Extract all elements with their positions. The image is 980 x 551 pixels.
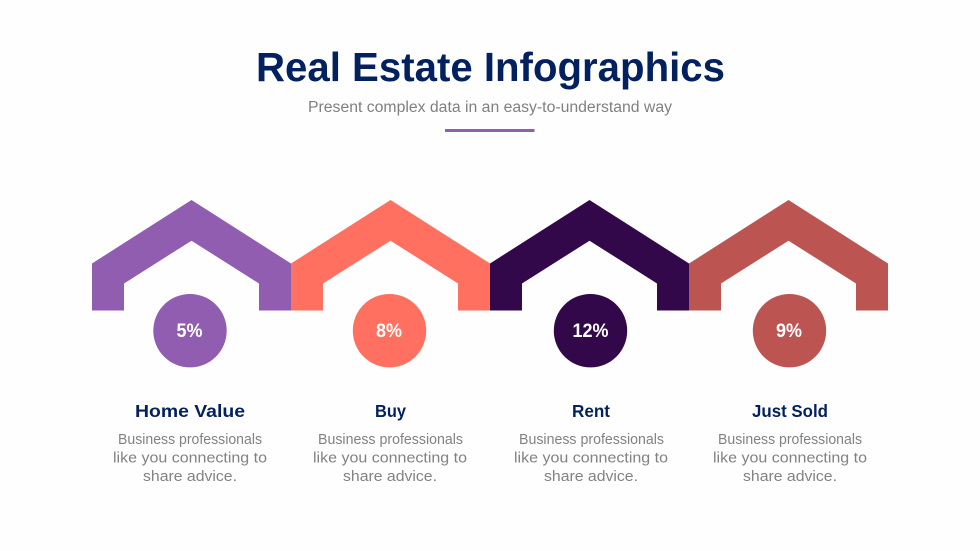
description: rent: Business professionals bbox=[519, 432, 664, 448]
percentage badge: 8% bbox=[353, 294, 426, 367]
description: just sold: like you connecting to bbox=[713, 450, 867, 466]
percentage badge: 9%: 9% bbox=[776, 321, 802, 342]
description: just sold: Business professionals bbox=[718, 432, 862, 448]
description: rent: share advice. bbox=[544, 469, 638, 485]
description: home value: share advice. bbox=[143, 469, 237, 485]
description: just sold: share advice. bbox=[743, 469, 837, 485]
percentage badge: 5% bbox=[153, 294, 227, 367]
description: buy: Business professionals bbox=[318, 432, 463, 448]
description: buy bbox=[313, 432, 467, 485]
description: home value: Business professionals bbox=[118, 432, 262, 448]
icon: brick red house roof bbox=[689, 200, 888, 310]
panel: just sold bbox=[689, 200, 888, 485]
description: rent: like you connecting to bbox=[514, 450, 668, 466]
title underline accent bbox=[445, 129, 534, 132]
icon: dark plum house roof bbox=[490, 200, 689, 310]
description: home value: like you connecting to bbox=[113, 450, 267, 466]
panel: buy bbox=[291, 200, 490, 485]
heading: home value: Home Value bbox=[135, 401, 245, 421]
subtitle: Present complex data in an easy-to-understand way bbox=[308, 99, 672, 116]
panel: home value bbox=[92, 200, 291, 485]
heading: buy: Buy bbox=[375, 401, 406, 421]
percentage badge: 8%: 8% bbox=[376, 321, 402, 342]
percentage badge: 12%: 12% bbox=[572, 321, 609, 342]
description: buy: like you connecting to bbox=[313, 450, 467, 466]
heading: just sold: Just Sold bbox=[752, 401, 828, 421]
description: rent bbox=[514, 432, 668, 485]
percentage badge: 12% bbox=[554, 294, 627, 367]
icon: coral house roof bbox=[291, 200, 490, 310]
title: Real Estate Infographics bbox=[256, 44, 725, 90]
percentage badge: 5%: 5% bbox=[176, 321, 203, 342]
description: just sold bbox=[713, 432, 867, 485]
icon: purple house roof bbox=[92, 200, 291, 310]
panel: rent bbox=[490, 200, 689, 485]
description: buy: share advice. bbox=[343, 469, 437, 485]
heading: rent: Rent bbox=[572, 401, 610, 421]
description: home value bbox=[113, 432, 267, 485]
percentage badge: 9% bbox=[753, 294, 826, 367]
